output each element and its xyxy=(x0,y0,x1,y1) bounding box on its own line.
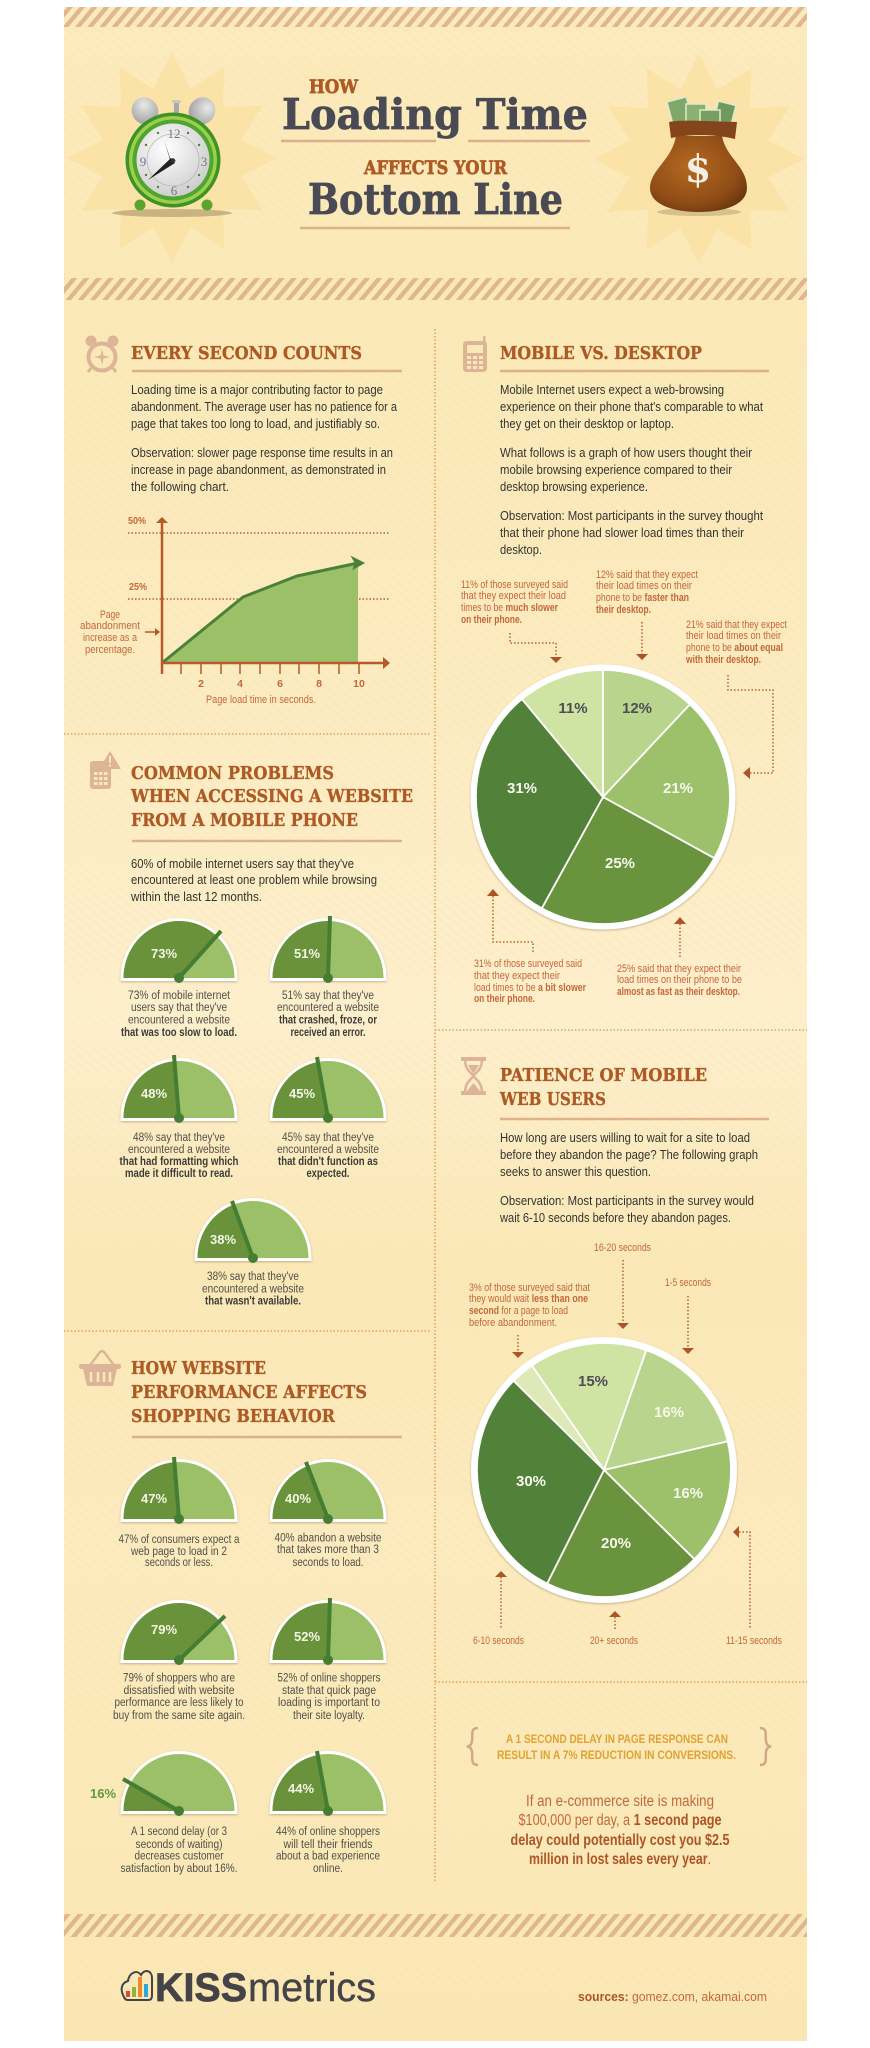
gauge 40%: seconds to load. xyxy=(292,1557,364,1569)
right brace xyxy=(760,1728,771,1765)
callout: 1-5 seconds xyxy=(665,1277,711,1354)
icon: alarm clock xyxy=(112,92,232,217)
text block: desktop. xyxy=(500,542,542,557)
text block: 60% of mobile internet users say that they've xyxy=(131,856,354,871)
callout: 25%: almost as fast as their desktop. xyxy=(617,986,740,998)
gauge 40%: 40% abandon a website xyxy=(274,1532,382,1544)
callout: 11%: 11% of those surveyed said xyxy=(461,579,568,591)
pie chart: patience xyxy=(471,1337,737,1603)
gauge 73%: users say that they've xyxy=(131,1002,227,1014)
pie chart: mobile vs desktop: 11% xyxy=(558,700,588,717)
text block: Mobile Internet users expect a web-browsing xyxy=(500,382,724,397)
panel: patience of mobile web users xyxy=(461,1059,782,1647)
callout: 3%: second for a page to load xyxy=(469,1305,568,1317)
title: Loading Time xyxy=(282,90,588,139)
gauge 47%: seconds or less. xyxy=(145,1557,213,1569)
icon: starburst behind clock xyxy=(67,53,277,263)
callout: 16-20 seconds xyxy=(594,1242,651,1329)
text block: desktop browsing experience. xyxy=(500,479,648,494)
header xyxy=(67,53,804,264)
gauge 48%: 48% xyxy=(141,1086,167,1101)
gauge 52% xyxy=(270,1598,386,1722)
area chart xyxy=(80,515,390,706)
callout: 12%: their desktop. xyxy=(596,604,651,616)
area chart: increase as a xyxy=(83,632,137,644)
text block: If an e-commerce site is making xyxy=(526,1793,714,1810)
icon: alarm clock: 6 xyxy=(171,183,178,198)
callout: 21%: with their desktop. xyxy=(685,654,761,666)
callout: 31%: that they expect their xyxy=(474,970,560,982)
callout: 20+ seconds xyxy=(590,1611,638,1647)
gauge 38%: that wasn't available. xyxy=(205,1296,301,1308)
gauge 52%: their site loyalty. xyxy=(293,1710,365,1722)
gauge 48%: that had formatting which xyxy=(120,1156,238,1168)
callout: 31%: 31% of those surveyed said xyxy=(474,958,582,970)
text block: they get on their desktop or laptop. xyxy=(500,416,674,431)
gauge 44%: will tell their friends xyxy=(283,1839,373,1851)
gauge 44%: about a bad experience xyxy=(276,1850,380,1862)
pie chart: patience: 30% xyxy=(516,1473,546,1490)
gauge 79%: buy from the same site again. xyxy=(113,1710,245,1722)
gauge 51%: that crashed, froze, or xyxy=(279,1014,377,1026)
callout: 25%: load times on their phone to be xyxy=(617,974,742,986)
heading xyxy=(499,1065,707,1110)
icon: money bag xyxy=(650,97,747,216)
text block xyxy=(500,382,763,557)
text block xyxy=(131,382,398,494)
title: Bottom Line xyxy=(308,175,563,224)
gauge 40%: 40% xyxy=(285,1491,311,1506)
area chart: 25% xyxy=(129,581,148,593)
text block: seeks to answer this question. xyxy=(500,1164,651,1179)
heading: MOBILE VS. DESKTOP xyxy=(500,343,702,364)
gauge 45%: expected. xyxy=(306,1168,350,1180)
text block: How long are users willing to wait for a site to load xyxy=(500,1130,750,1145)
callout: 12%: their load times on their xyxy=(596,580,692,592)
text block: mobile browsing experience compared to their xyxy=(500,462,733,477)
sources: sources: gomez.com, akamai.com xyxy=(578,1989,767,2004)
heading: PATIENCE OF MOBILE xyxy=(500,1065,707,1086)
area chart: 8 xyxy=(316,678,322,690)
gauge 47% xyxy=(118,1457,240,1569)
gauge 51%: 51% xyxy=(294,946,320,961)
wordmark xyxy=(155,1966,376,2010)
area chart: 6 xyxy=(277,678,283,690)
title xyxy=(281,76,590,228)
panel: conversion callout xyxy=(467,1728,771,1868)
gauge 40% xyxy=(270,1459,386,1569)
text block xyxy=(130,856,377,904)
panel: shopping behavior xyxy=(79,1351,402,1875)
icon: money bag: $ xyxy=(685,146,711,191)
callout: 6-10 seconds: 6-10 seconds xyxy=(473,1635,524,1647)
text block: within the last 12 months. xyxy=(130,889,262,904)
text block: the following chart. xyxy=(131,479,229,494)
pie chart: patience: 15% xyxy=(578,1373,608,1390)
gauge 45%: encountered a website xyxy=(277,1144,379,1156)
gauge 73%: encountered a website xyxy=(128,1014,230,1026)
title: AFFECTS YOUR xyxy=(363,157,507,179)
gauge 16%: 16% xyxy=(90,1786,116,1801)
gauge 45%: 45% say that they've xyxy=(282,1132,374,1144)
heading: SHOPPING BEHAVIOR xyxy=(131,1406,336,1427)
text block: delay could potentially cost you $2.5 xyxy=(510,1832,730,1849)
icon: starburst behind money bag xyxy=(594,54,804,264)
callout: 31%: on their phone. xyxy=(474,993,535,1005)
gauge 47%: 47% xyxy=(141,1491,167,1506)
callout: 3% xyxy=(469,1282,590,1358)
callout: 11-15 seconds: 11-15 seconds xyxy=(726,1635,782,1647)
heading xyxy=(131,1358,367,1427)
area chart: 10 xyxy=(353,678,365,690)
gauge 38%: 38% xyxy=(210,1232,236,1247)
callout: 20+ seconds: 20+ seconds xyxy=(590,1635,638,1647)
text block: Loading time is a major contributing factor to page xyxy=(131,382,383,397)
heading: FROM A MOBILE PHONE xyxy=(131,810,358,831)
gauge 51%: received an error. xyxy=(290,1027,366,1039)
text block: increase in page abandonment, as demonstrated in xyxy=(131,462,386,477)
callout: 6-10 seconds xyxy=(473,1571,524,1647)
icon: alarm clock: 3 xyxy=(201,154,207,169)
gauge 44%: online. xyxy=(313,1863,343,1875)
callout: 11%: that they expect their load xyxy=(461,590,566,602)
callout: 11-15 seconds xyxy=(726,1526,782,1647)
panel: common problems xyxy=(90,751,413,1308)
gauge 44%: 44% of online shoppers xyxy=(276,1826,380,1838)
callout: 11% xyxy=(461,579,568,663)
pie chart: mobile vs desktop: 12% xyxy=(622,700,652,717)
callout: 21% xyxy=(685,619,787,779)
callout: 11%: on their phone. xyxy=(461,614,522,626)
area chart: 50% xyxy=(128,515,147,527)
gauge 73%: 73% xyxy=(151,946,177,961)
pie chart: mobile vs desktop: 21% xyxy=(663,780,693,797)
area chart: 2 xyxy=(198,678,204,690)
text block: million in lost sales every year. xyxy=(529,1851,711,1868)
gauge 16%: decreases customer xyxy=(134,1850,224,1862)
heading: WHEN ACCESSING A WEBSITE xyxy=(130,786,413,807)
panel: every second counts xyxy=(80,336,402,706)
gauge 51%: encountered a website xyxy=(277,1002,379,1014)
gauge 52%: state that quick page xyxy=(282,1685,376,1697)
callout: 31%: load times to be a bit slower xyxy=(474,982,587,994)
gauge 51%: 51% say that they've xyxy=(282,990,374,1002)
gauge 16%: satisfaction by about 16%. xyxy=(120,1863,238,1875)
gauge 79% xyxy=(113,1600,245,1722)
left brace xyxy=(467,1728,478,1765)
pie chart: mobile vs desktop: 25% xyxy=(605,855,635,872)
gauge 16%: A 1 second delay (or 3 xyxy=(131,1826,227,1838)
wordmark: KISS xyxy=(155,1966,247,2010)
pie chart: patience: 20% xyxy=(601,1535,631,1552)
icon: logo cloud with bars xyxy=(122,1971,152,2000)
icon: hourglass xyxy=(461,1059,486,1093)
gauge 44% xyxy=(270,1751,386,1875)
gauge 16%: seconds of waiting) xyxy=(136,1839,223,1851)
callout text: RESULT IN A 7% REDUCTION IN CONVERSIONS. xyxy=(497,1748,736,1762)
callout: 3%: before abandonment. xyxy=(469,1317,557,1329)
icon: calculator with warning xyxy=(90,751,121,789)
callout: 21%: 21% said that they expect xyxy=(686,619,787,631)
text block: abandonment. The average user has no patience for a xyxy=(131,399,398,414)
callout: 11%: times to be much slower xyxy=(461,602,559,614)
callout: 21%: phone to be about equal xyxy=(686,642,783,654)
gauge 38% xyxy=(194,1198,312,1308)
gauge 79%: dissatisfied with website xyxy=(124,1685,234,1697)
gauge 48% xyxy=(120,1055,238,1180)
callout: 3%: 3% of those surveyed said that xyxy=(469,1282,590,1294)
callout text xyxy=(497,1732,736,1762)
gauge 47%: web page to load in 2 xyxy=(130,1546,227,1558)
callout: 12%: phone to be faster than xyxy=(596,592,689,604)
pie chart: patience: 16% xyxy=(654,1404,684,1421)
text block: What follows is a graph of how users thought their xyxy=(500,445,753,460)
gauge 48%: 48% say that they've xyxy=(133,1132,225,1144)
callout: 25%: 25% said that they expect their xyxy=(617,963,741,975)
gauge 52%: 52% of online shoppers xyxy=(278,1672,381,1684)
gauge 44%: 44% xyxy=(288,1781,314,1796)
gauge 40%: that takes more than 3 xyxy=(277,1544,379,1556)
gauge 45%: 45% xyxy=(289,1086,315,1101)
text block: Observation: slower page response time results in an xyxy=(131,445,393,460)
gauge 51% xyxy=(270,916,386,1039)
panel: mobile vs desktop xyxy=(461,336,787,1005)
gauge 73% xyxy=(120,918,238,1039)
icon: basket xyxy=(79,1351,121,1386)
icon: alarm clock: 9 xyxy=(140,154,146,169)
text block: wait 6-10 seconds before they abandon pages. xyxy=(499,1210,731,1225)
gauge 52%: 52% xyxy=(294,1629,320,1644)
callout: 3%: they would wait less than one xyxy=(469,1293,588,1305)
heading: WEB USERS xyxy=(499,1089,606,1110)
heading: PERFORMANCE AFFECTS xyxy=(131,1382,367,1403)
text block: that their phone had slower load times than their xyxy=(500,525,745,540)
gauge 73%: 73% of mobile internet xyxy=(128,990,231,1002)
pie chart: mobile vs desktop xyxy=(470,664,736,930)
gauge 45%: that didn't function as xyxy=(278,1156,378,1168)
gauge 48%: encountered a website xyxy=(128,1144,230,1156)
heading xyxy=(130,763,413,831)
text block: before they abandon the page? The following graph xyxy=(500,1147,758,1162)
text block: experience on their phone that's comparable to what xyxy=(500,399,763,414)
text block xyxy=(499,1130,758,1225)
callout: 31% xyxy=(474,889,587,1005)
heading: EVERY SECOND COUNTS xyxy=(131,343,362,364)
gauge 79%: 79% xyxy=(151,1622,177,1637)
gauge 47%: 47% of consumers expect a xyxy=(118,1534,240,1546)
gauge 45% xyxy=(270,1057,386,1180)
heading: HOW WEBSITE xyxy=(131,1358,266,1379)
callout: 25% xyxy=(617,917,742,998)
pie chart: mobile vs desktop: 31% xyxy=(507,780,537,797)
text block: page that takes too long to load, and justifiably so. xyxy=(131,416,380,431)
pie chart: patience: 16% xyxy=(673,1485,703,1502)
gauge 48%: made it difficult to read. xyxy=(125,1168,233,1180)
callout: 1-5 seconds: 1-5 seconds xyxy=(665,1277,711,1289)
callout: 12%: 12% said that they expect xyxy=(596,569,698,581)
callout: 12% xyxy=(596,569,698,660)
icon: alarm clock small xyxy=(86,336,118,372)
callout: 16-20 seconds: 16-20 seconds xyxy=(594,1242,651,1254)
gauge 38%: encountered a website xyxy=(202,1284,304,1296)
area chart: percentage. xyxy=(85,644,135,656)
bottom stripe band xyxy=(64,1914,807,1937)
area chart: abandonment xyxy=(80,620,140,632)
gauge 79%: performance are less likely to xyxy=(114,1697,244,1709)
gauge 38%: 38% say that they've xyxy=(207,1271,299,1283)
title: HOW xyxy=(309,76,359,98)
top stripe band xyxy=(64,7,807,27)
text block: $100,000 per day, a 1 second page xyxy=(518,1812,722,1829)
text block: Observation: Most participants in the survey thought xyxy=(500,508,763,523)
icon: mobile phone xyxy=(463,336,487,372)
callout: 21%: their load times on their xyxy=(686,630,781,642)
column separators xyxy=(64,329,807,1882)
text block: encountered at least one problem while browsing xyxy=(131,872,377,887)
heading: COMMON PROBLEMS xyxy=(131,763,334,784)
text block: Observation: Most participants in the survey would xyxy=(500,1193,754,1208)
text block xyxy=(510,1793,730,1868)
footer logo xyxy=(122,1966,376,2010)
gauge 52%: loading is important to xyxy=(278,1697,380,1709)
area chart: Page xyxy=(100,609,120,621)
wordmark: metrics xyxy=(248,1966,376,2010)
second stripe band xyxy=(64,278,807,300)
gauge 16% xyxy=(90,1751,238,1875)
area chart: 4 xyxy=(237,678,243,690)
callout text: A 1 SECOND DELAY IN PAGE RESPONSE CAN xyxy=(506,1732,728,1746)
icon: alarm clock: 12 xyxy=(168,126,180,141)
gauge 79%: 79% of shoppers who are xyxy=(123,1672,235,1684)
gauge 73%: that was too slow to load. xyxy=(121,1027,237,1039)
area chart: Page load time in seconds. xyxy=(206,694,316,706)
